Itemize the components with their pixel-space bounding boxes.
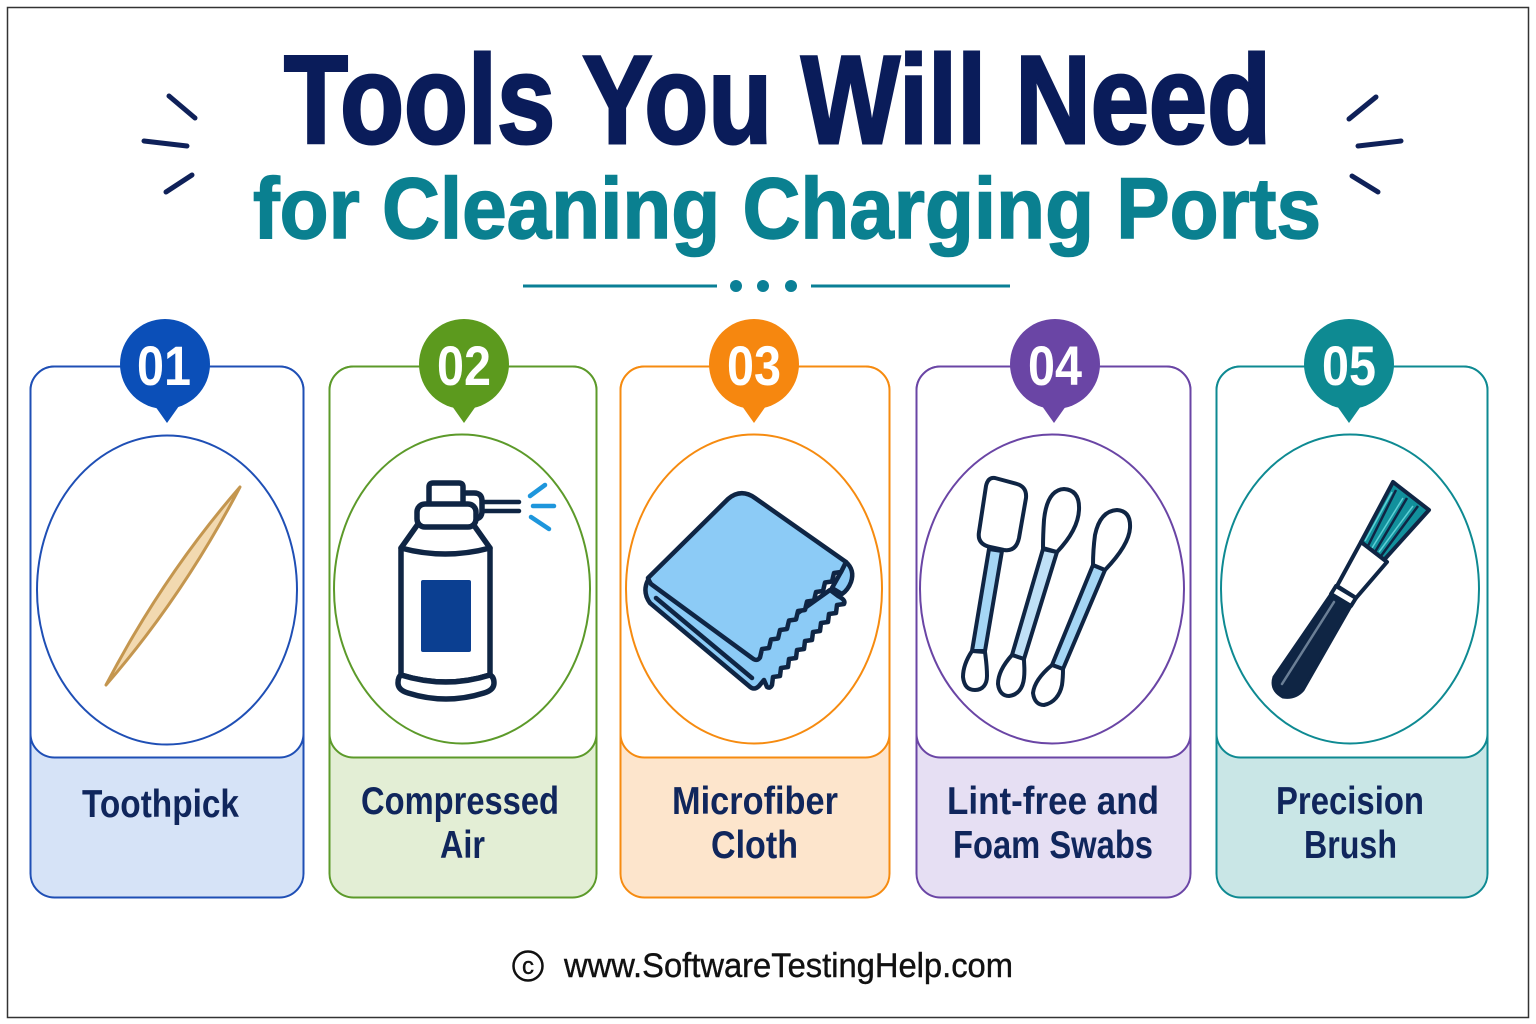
number badge 02: [419, 319, 509, 423]
subheading: for Cleaning Charging Ports: for Cleaning Charging Ports: [253, 161, 1321, 257]
label: Compressed Air: Compressed: [361, 780, 559, 823]
icon: foam swab: [963, 478, 1026, 690]
label: Lint-free and Foam Swabs: Foam Swabs: [953, 824, 1153, 867]
number badge 03: 03: [727, 334, 781, 397]
icon: spray can: [398, 483, 519, 699]
number badge 01: [120, 319, 210, 423]
circle frame: [1221, 434, 1479, 744]
panel: microfiber cloth: [620, 319, 890, 898]
label: Microfiber Cloth: Microfiber: [672, 780, 838, 823]
label: Lint-free and Foam Swabs: [947, 780, 1159, 867]
label: Precision Brush: Brush: [1304, 824, 1397, 867]
icon: lint-free swab middle: [998, 489, 1079, 696]
number badge 01: 01: [137, 334, 191, 397]
number badge 04: 04: [1028, 334, 1082, 397]
label: Precision Brush: Precision: [1276, 780, 1424, 823]
panel: precision brush: [1216, 319, 1488, 898]
circle frame: [920, 434, 1184, 744]
sparkle accents right: [1349, 97, 1401, 192]
icon: toothpick: [106, 487, 240, 685]
label: Compressed Air: Air: [440, 824, 485, 867]
sparkle accents left: [144, 96, 195, 192]
circle frame: [626, 434, 882, 744]
panel: toothpick: [30, 319, 304, 898]
label: Precision Brush: [1276, 780, 1424, 867]
number badge 03: [709, 319, 799, 423]
footer copyright: www.SoftwareTestingHelp.com: [563, 947, 1013, 985]
circle frame: [37, 436, 297, 744]
icon: lint-free swab right: [1033, 510, 1130, 705]
panel: swabs: [916, 319, 1190, 898]
title divider: [523, 280, 1010, 292]
heading: Tools You Will Need: Tools You Will Need: [284, 31, 1271, 170]
label: Compressed Air: [361, 780, 559, 867]
number badge 05: [1304, 319, 1394, 423]
label: Microfiber Cloth: Cloth: [711, 824, 798, 867]
icon: folded cloth: [645, 493, 852, 688]
number badge 05: 05: [1322, 334, 1376, 397]
number badge 02: 02: [437, 334, 491, 397]
footer copyright: c: [522, 953, 534, 980]
icon: spray lines: [530, 485, 554, 529]
number badge 04: [1010, 319, 1100, 423]
label: Microfiber Cloth: [672, 780, 838, 867]
circle frame: [334, 434, 590, 744]
icon: brush: [1273, 482, 1429, 697]
title: [253, 31, 1321, 257]
label: Lint-free and Foam Swabs: Lint-free and: [947, 780, 1159, 823]
panel: compressed air: [330, 319, 596, 898]
label: Toothpick: Toothpick: [82, 783, 239, 826]
